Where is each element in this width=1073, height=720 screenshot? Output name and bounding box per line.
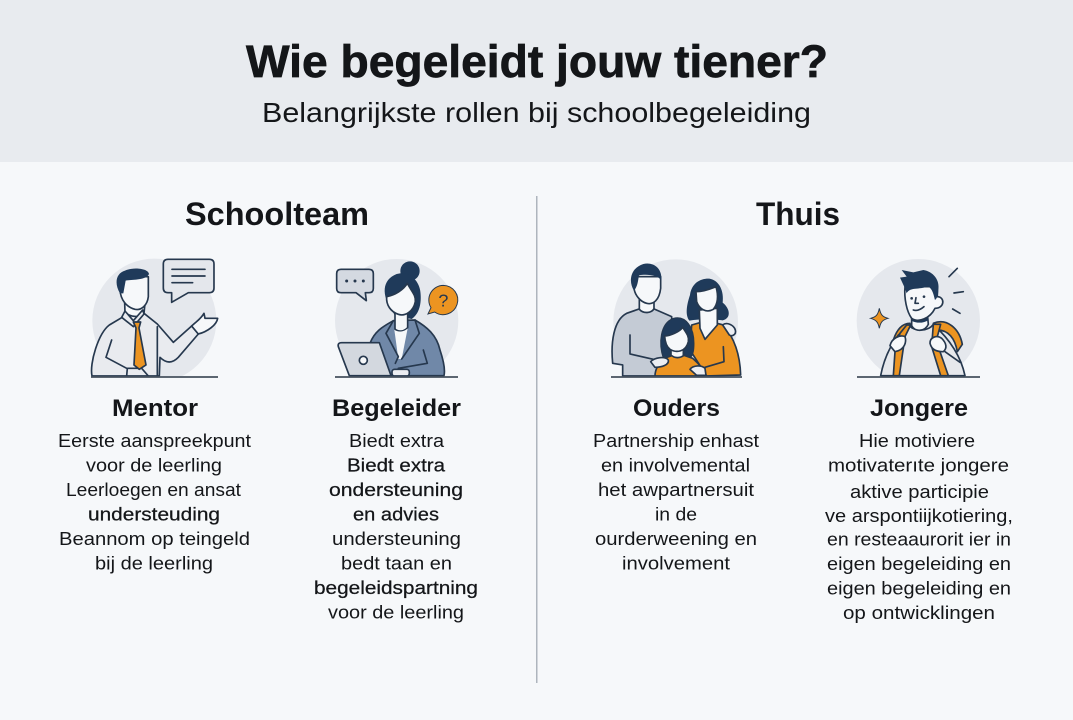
role description: Ouders: en involvemental [601,454,750,476]
role description: Jongere: eigen begeleiding en [827,578,1011,598]
role description: Jongere: op ontwicklingen [843,602,995,623]
role description: Ouders: ourderweening en [595,528,757,549]
role name: Jongere: Jongere [870,395,968,422]
role description: Begeleider: Biedt extra [347,454,446,476]
panel: Schoolteam [58,196,478,622]
role description: Ouders: in de [655,504,697,524]
divider [536,196,538,683]
heading: Schoolteam: Schoolteam [185,196,369,232]
role description: Mentor [58,430,252,574]
role description: Mentor: understeuding [88,504,220,524]
role: Mentor [58,259,252,574]
heading: Thuis: Thuis [756,196,840,232]
role name: Mentor: Mentor [112,395,198,422]
role description: Mentor: Eerste aanspreekpunt [58,430,252,451]
role description: Begeleider: voor de leerling [328,602,464,622]
role description: Mentor: bij de leerling [95,552,213,574]
role name: Begeleider: Begeleider [332,395,461,422]
role description: Jongere: eigen begeleiding en [827,553,1011,574]
panel: Thuis [593,196,1013,623]
icon: question mark: ? [438,290,448,310]
role description: Jongere: Hie motiviere [859,430,975,451]
icon: coach with laptop and question bubble [335,259,458,382]
role description: Mentor: voor de leerling [86,454,222,476]
baselines: Schoolteam [91,376,458,378]
role: Jongere [825,259,1013,623]
icon: family [612,259,741,384]
subtitle: Belangrijkste rollen bij schoolbegeleiding [262,97,811,128]
role: Begeleider [314,259,478,622]
role description: Ouders: het awpartnersuit [598,479,755,500]
role description: Begeleider: understeuning [332,528,461,549]
role description: Ouders: Partnership enhast [593,430,760,451]
role description: Begeleider: en advies [353,504,439,524]
role description: Jongere: en resteaaurorit ier in [827,528,1011,550]
role description: Jongere: aktive participie [850,481,989,502]
baselines: Thuis [611,376,980,378]
role description: Begeleider: begeleidspartning [314,577,478,598]
role description: Mentor: Leerloegen en ansat [66,479,242,500]
title: Wie begeleidt jouw tiener? [246,36,828,87]
role: Ouders [593,259,760,574]
role description: Jongere: motivaterıte jongere [828,454,1009,476]
role description: Ouders: involvement [622,552,731,574]
role description: Ouders [593,430,760,574]
icon: teenager with backpack [857,259,980,382]
role name: Ouders: Ouders [633,395,720,422]
role description: Jongere: ve arspontiijkotiering, [825,505,1013,526]
role description: Begeleider: ondersteuning [329,479,463,500]
role description: Mentor: Beannom op teingeld [59,528,250,549]
header band [0,0,1073,162]
role description: Begeleider [314,430,478,622]
icon: mentor with speech bubble [92,259,218,383]
role description: Begeleider: Biedt extra [349,430,445,451]
role description: Jongere [825,430,1013,623]
role description: Begeleider: bedt taan en [341,552,452,574]
